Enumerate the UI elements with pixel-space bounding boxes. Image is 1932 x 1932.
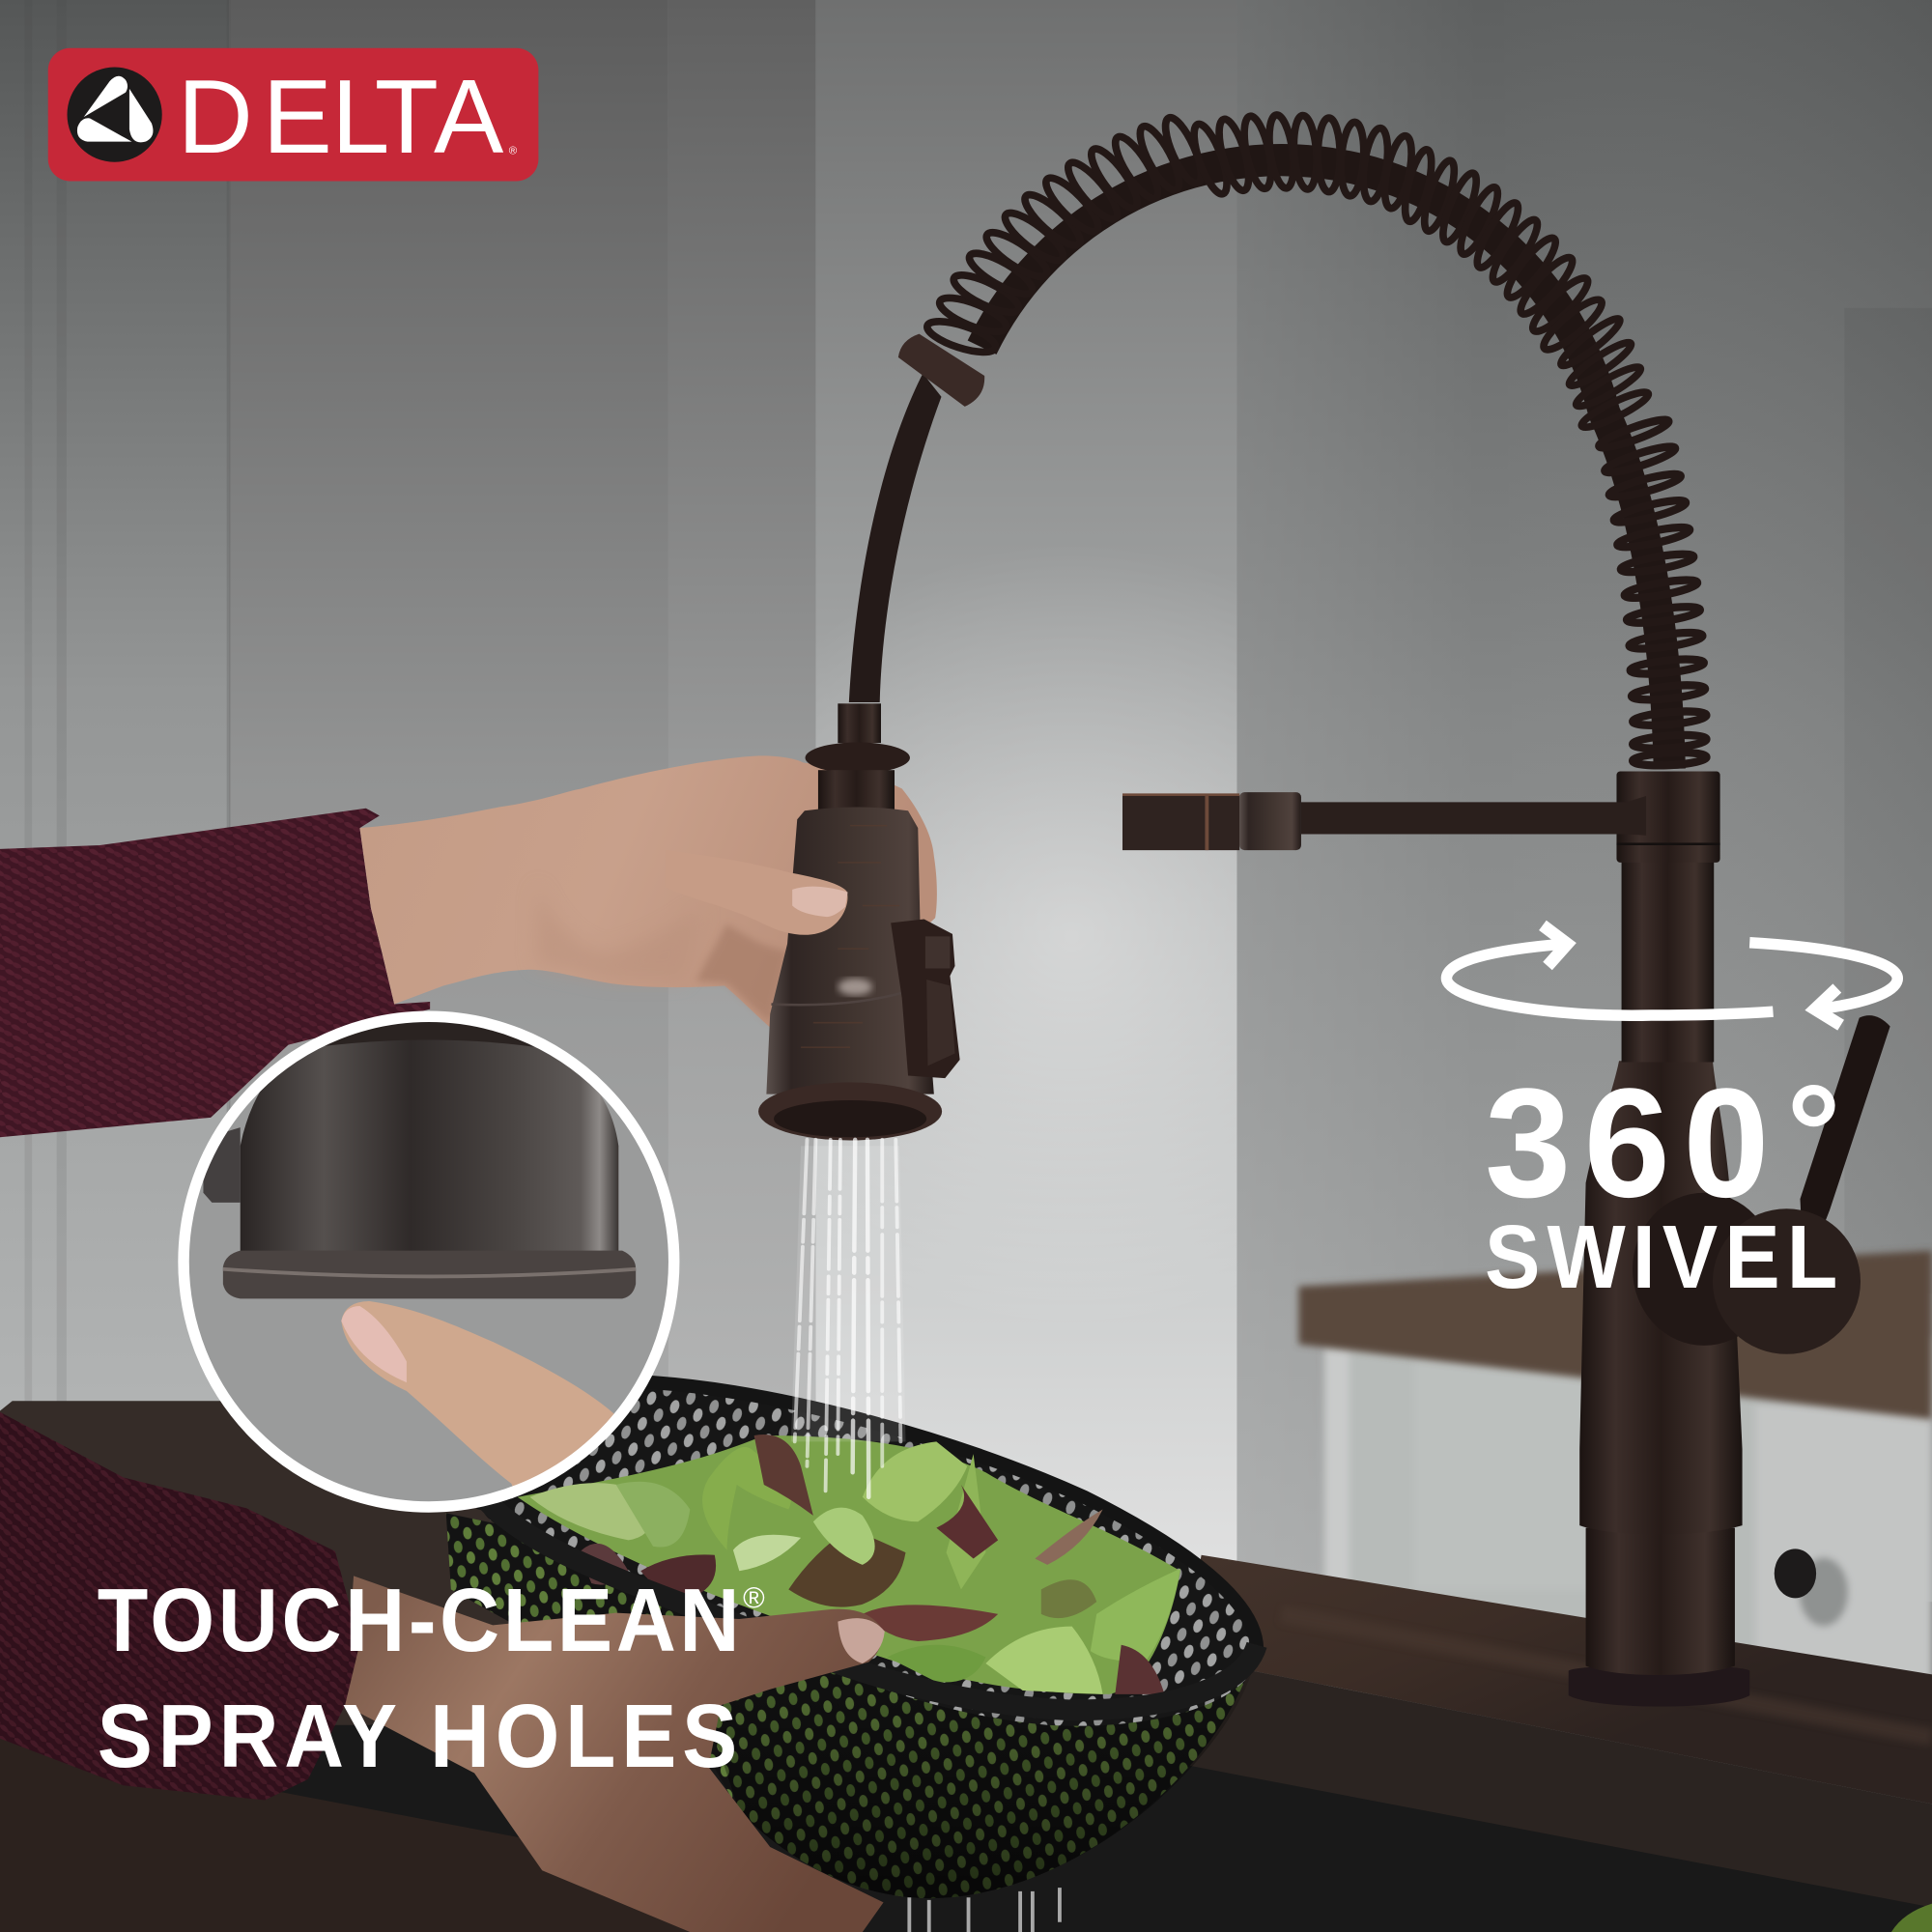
logo: Delta: DELTA (178, 58, 504, 175)
icon: swivel rotation arrows (1446, 925, 1897, 1025)
foot (1569, 1665, 1749, 1707)
left arc with arrow (1446, 944, 1773, 1015)
heading: 360 degree swivel: 360 (1485, 1058, 1770, 1231)
water droplets below colander (909, 1888, 1060, 1932)
body (766, 807, 934, 1094)
knob (1713, 1208, 1861, 1354)
logo: Delta: ® (509, 145, 518, 156)
upper neck (818, 770, 895, 812)
inset faucet cap (325, 1022, 535, 1047)
colander body mesh (446, 1513, 1254, 1898)
inset side button (203, 1127, 241, 1203)
inset faucet body (241, 1040, 618, 1252)
cabinet fronts (1324, 1337, 1932, 1694)
background: rear wooden countertop and cabinets (1298, 1251, 1932, 1694)
left rear counter (0, 1401, 640, 1725)
rear countertop (1298, 1251, 1932, 1419)
water spray (791, 1140, 906, 1497)
sink basin (0, 1700, 1932, 1932)
colander back rim (483, 1382, 1257, 1651)
right countertop (1182, 1555, 1932, 1907)
brushed finish (801, 826, 899, 1047)
inset fingernail (341, 1306, 407, 1382)
upper coil loops (922, 111, 1655, 434)
spring coil (922, 111, 1707, 769)
bottom flange (758, 1083, 942, 1140)
heading: touch-clean spray holes: SPRAY HOLES (98, 1686, 743, 1786)
right arc with arrow (1749, 943, 1897, 1009)
faucet base and body (1569, 856, 1890, 1707)
logo mark (68, 68, 162, 162)
thumbnail (792, 887, 848, 917)
thumb (666, 850, 848, 935)
clip collar (1239, 792, 1301, 850)
lower hand (345, 1576, 885, 1932)
lettuce corner bottom right (1891, 1904, 1932, 1932)
main column (1579, 1061, 1743, 1535)
clip (1122, 795, 1239, 850)
sprayer button (891, 920, 960, 1078)
hub (1633, 1193, 1776, 1346)
arm (1301, 796, 1646, 836)
salad (518, 1435, 1180, 1694)
heading: 360 degree swivel: SWIVEL (1485, 1207, 1844, 1307)
spring end collar (898, 334, 984, 407)
heading: touch-clean spray holes (98, 1570, 765, 1786)
raised arm sleeve (0, 809, 430, 1137)
lever handle (1801, 1015, 1890, 1233)
hose (849, 373, 941, 702)
swivel collar (1616, 771, 1720, 863)
inset circle: touch-clean spray holes close-up (184, 1010, 674, 1528)
heading: touch-clean spray holes: TOUCH-CLEAN (98, 1570, 743, 1670)
inset fingertip (341, 1301, 614, 1486)
counter surface (1182, 1555, 1932, 1804)
faucet spout arm (1122, 771, 1720, 863)
lower arm sleeve (0, 1412, 359, 1801)
logo: Delta (48, 48, 538, 181)
heading: touch-clean spray holes: ® (743, 1582, 765, 1615)
spray head (758, 703, 960, 1140)
upper hand (359, 755, 937, 1029)
lower coil rings (1597, 415, 1707, 767)
lower column (1586, 1528, 1735, 1675)
flange (806, 742, 910, 773)
counter front edge (1182, 1658, 1932, 1907)
heading: 360 degree swivel (1485, 1057, 1844, 1307)
inner tube (982, 160, 1669, 769)
lower band edge (771, 992, 906, 1005)
lower-left counter front (0, 1739, 764, 1932)
neck (838, 703, 881, 743)
highlight (838, 979, 872, 996)
inset base ring (223, 1251, 636, 1298)
cabinet knob (1775, 1548, 1816, 1598)
upper stem (1622, 856, 1714, 1062)
colander front rim (487, 1501, 1257, 1710)
heading: 360 degree swivel: ° (1786, 1057, 1841, 1208)
colander interior back wall (483, 1382, 1260, 1726)
leaves (529, 1483, 650, 1540)
thumbnail (838, 1618, 885, 1663)
